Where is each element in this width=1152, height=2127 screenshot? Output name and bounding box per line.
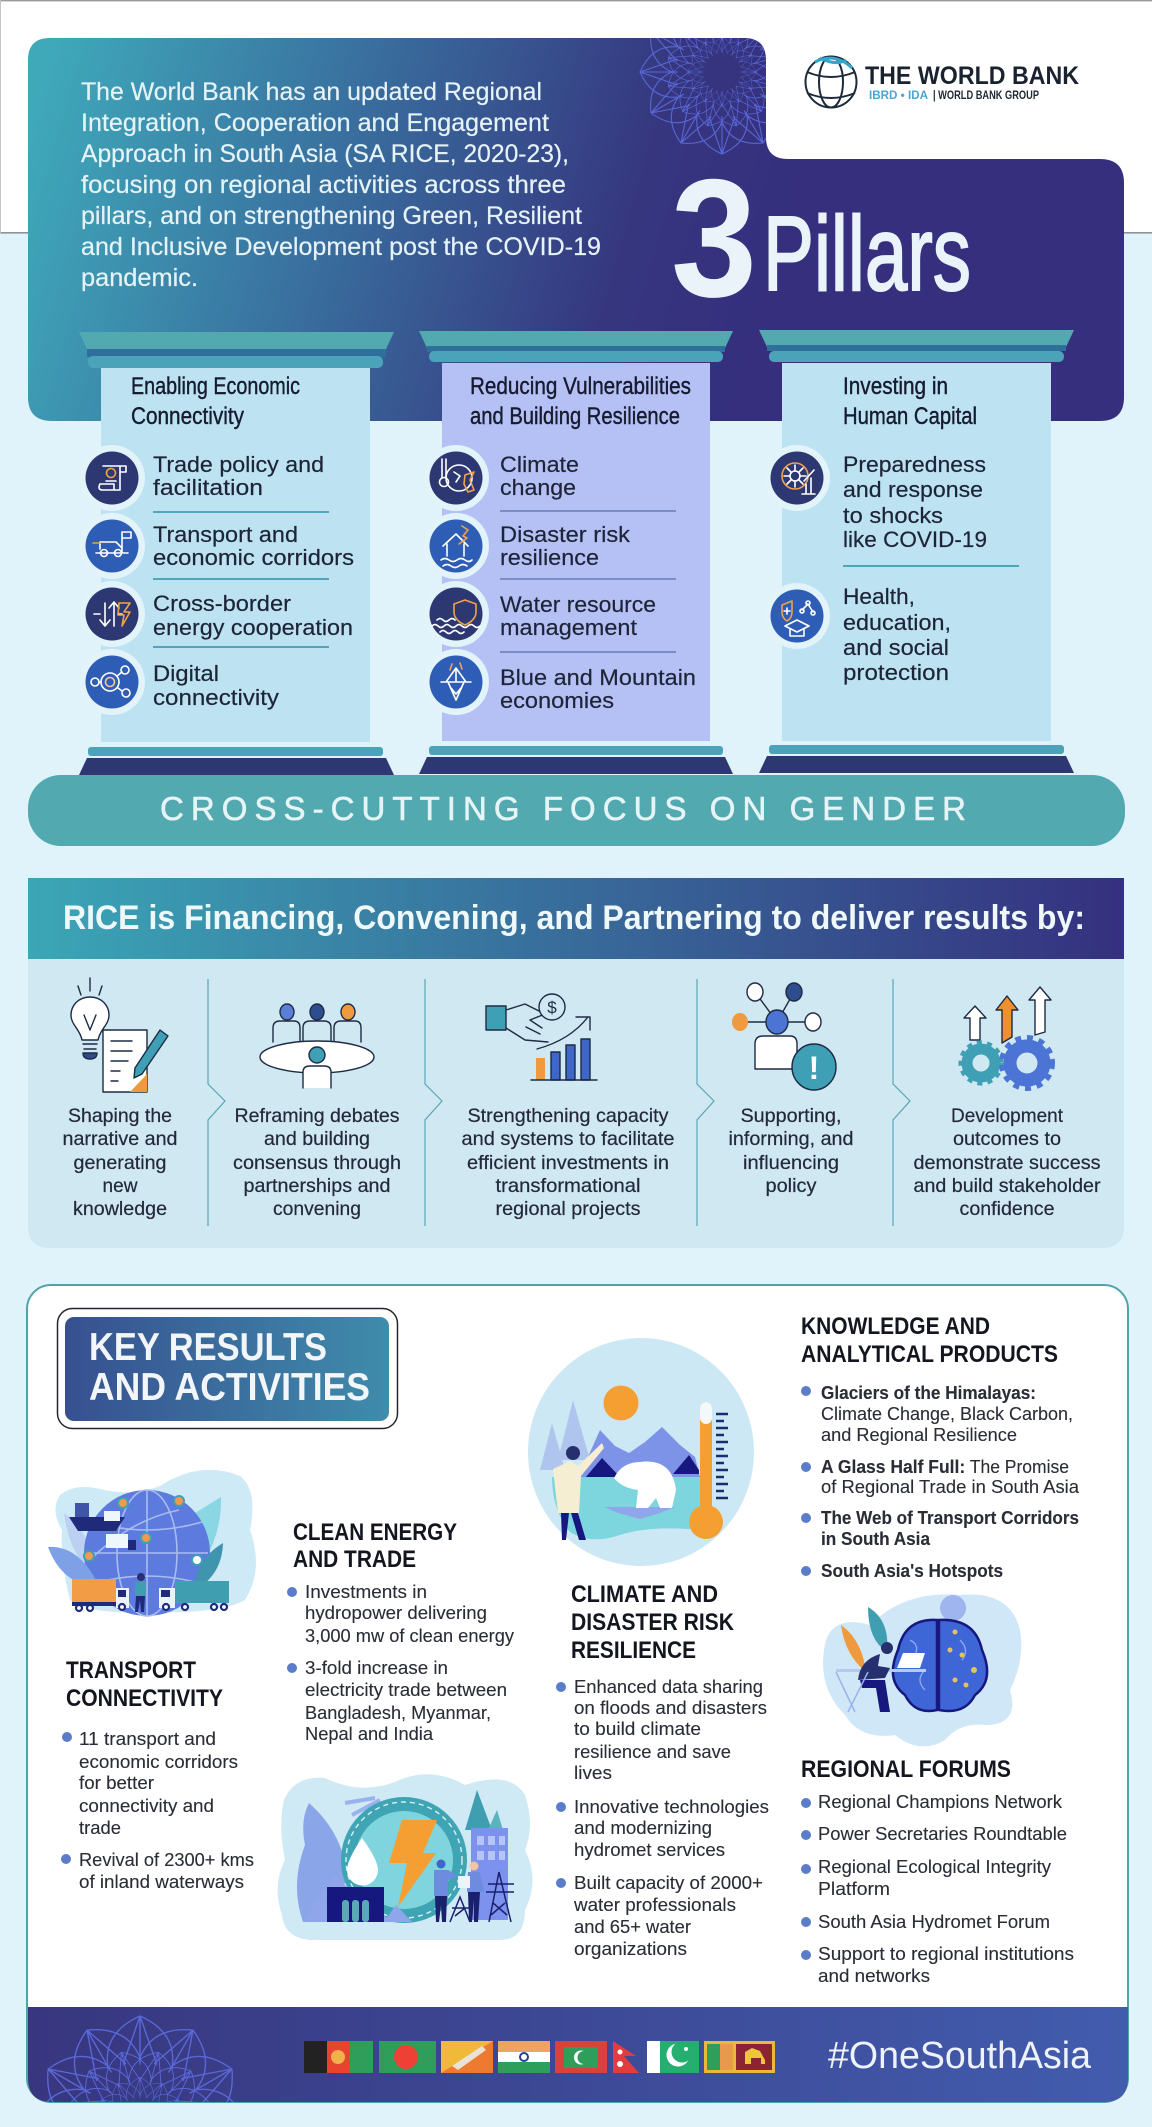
section: climate and disaster risk resilience — [556, 1581, 769, 1959]
intro text: pillars, and on strengthening Green, Resilient — [81, 202, 582, 230]
section: climate and disaster risk resilience: on floods and disasters — [574, 1697, 767, 1718]
section: knowledge and analytical products — [801, 1313, 1080, 1581]
section: climate and disaster risk resilience: Innovative technologies — [574, 1796, 769, 1817]
pillar 3: Investing in Human Capital: Health, — [843, 584, 915, 609]
heading: key results and activities: AND ACTIVITIES — [89, 1366, 370, 1409]
title: 3 Pillars — [671, 144, 971, 332]
intro text: focusing on regional activities across three — [81, 171, 566, 199]
section: climate and disaster risk resilience: to build climate — [574, 1718, 701, 1739]
heading band — [28, 878, 1124, 959]
caption 5: outcomes to — [953, 1128, 1061, 1150]
caption 4: informing, and — [728, 1128, 854, 1150]
caption 5: confidence — [960, 1198, 1054, 1220]
section: knowledge and analytical products: and Regional Resilience — [821, 1424, 1017, 1445]
caption 1: knowledge — [73, 1198, 167, 1220]
section: climate and disaster risk resilience: organizations — [574, 1938, 687, 1959]
section: clean energy and trade: hydropower delivering — [305, 1602, 487, 1623]
title: 3 Pillars: 3 — [671, 144, 757, 332]
worker — [137, 1573, 145, 1581]
section: regional forums: Platform — [818, 1878, 890, 1899]
panel: intro header — [28, 0, 1124, 421]
item: mountain — [423, 649, 489, 715]
section: knowledge and analytical products: The Web of Transport Corridors — [821, 1507, 1079, 1528]
section: transport connectivity — [61, 1657, 254, 1892]
illustration: climate and polar bear — [528, 1338, 754, 1566]
section: knowledge and analytical products: Glaciers of the Himalayas: — [821, 1382, 1036, 1403]
caption 4 — [728, 1105, 854, 1197]
caption 5: and build stakeholder — [914, 1175, 1101, 1197]
towers — [450, 1872, 514, 1922]
flag: Maldives — [555, 2041, 607, 2073]
pillar 3: Investing in Human Capital: and response — [843, 477, 983, 502]
caption 2: Reframing debates — [234, 1105, 400, 1127]
item: energy — [79, 581, 145, 647]
item: health — [764, 583, 830, 649]
pillar 2: Reducing Vulnerabilities — [419, 331, 733, 774]
item: transport — [79, 513, 145, 579]
pillar 3: Investing in Human Capital — [759, 330, 1074, 773]
pillar 3: Investing in Human Capital: like COVID-19 — [843, 527, 987, 552]
section: climate and disaster risk resilience: DISASTER RISK — [571, 1609, 735, 1636]
pillar 3: Investing in Human Capital: protection — [843, 660, 949, 685]
heading: Connectivity — [131, 403, 244, 430]
section: climate and disaster risk resilience: hydromet services — [574, 1839, 725, 1860]
section: climate and disaster risk resilience: RESILIENCE — [571, 1637, 696, 1664]
icon: network advisor: ! — [809, 1050, 819, 1086]
pillar 1: Enabling Economic Connectivity: facilitation — [153, 475, 263, 500]
section: transport connectivity: for better — [79, 1772, 154, 1793]
logo: The World Bank: IBRD • IDA — [869, 88, 928, 102]
heading: key results and activities — [58, 1308, 398, 1428]
flag: Bangladesh — [379, 2041, 436, 2073]
illustration: transport globe — [48, 1470, 256, 1616]
section: climate and disaster risk resilience: resilience and save — [574, 1741, 731, 1762]
section: transport connectivity: trade — [79, 1817, 121, 1838]
heading: Enabling Economic — [131, 373, 300, 400]
icon: growth gears — [961, 987, 1052, 1088]
section: climate and disaster risk resilience: and modernizing — [574, 1817, 712, 1838]
section: clean energy and trade: 3-fold increase in — [305, 1657, 448, 1678]
illustration: brain and analyst — [823, 1594, 1021, 1746]
item: climate — [423, 445, 489, 511]
pillar 3: Investing in Human Capital: to shocks — [843, 503, 943, 528]
section: regional forums — [801, 1756, 1074, 1986]
section: regional forums: South Asia Hydromet Forum — [818, 1911, 1050, 1932]
section: transport connectivity: TRANSPORT — [66, 1657, 196, 1684]
logo: The World Bank: THE WORLD BANK — [865, 62, 1079, 90]
section: clean energy and trade: CLEAN ENERGY — [293, 1519, 457, 1546]
panel: RICE delivery — [28, 878, 1124, 1248]
pillar 2: Reducing Vulnerabilities: resilience — [500, 545, 599, 570]
hashtag: #OneSouthAsia — [828, 2035, 1092, 2077]
caption 3: transformational — [496, 1175, 640, 1197]
item: trade policy — [79, 445, 145, 511]
caption 3: Strengthening capacity — [468, 1105, 669, 1127]
flag: Bhutan — [441, 2041, 493, 2073]
trucks — [72, 1579, 116, 1602]
pillar 1: Enabling Economic Connectivity: Transport and — [153, 522, 298, 547]
pillar 1: Enabling Economic Connectivity: economic corridors — [153, 545, 354, 570]
section: knowledge and analytical products: ANALYTICAL PRODUCTS — [801, 1341, 1058, 1368]
heading: Reducing Vulnerabilities — [470, 373, 691, 400]
heading — [131, 373, 300, 430]
section: knowledge and analytical products: Climate Change, Black Carbon, — [821, 1403, 1073, 1424]
mandala ornament — [46, 2015, 234, 2102]
pillar 1: Enabling Economic Connectivity: energy cooperation — [153, 615, 353, 640]
icon: globe — [806, 56, 856, 108]
heading — [470, 373, 691, 430]
pillar 1: Enabling Economic Connectivity — [79, 332, 394, 775]
section: clean energy and trade: AND TRADE — [293, 1546, 416, 1573]
section: transport connectivity: 11 transport and — [79, 1728, 216, 1749]
caption 1: new — [102, 1175, 138, 1197]
intro text: Integration, Cooperation and Engagement — [81, 109, 549, 137]
pillar 2: Reducing Vulnerabilities: management — [500, 615, 638, 640]
section: climate and disaster risk resilience: lives — [574, 1762, 612, 1783]
mandala ornament — [640, 38, 766, 154]
caption 1: narrative and — [62, 1128, 178, 1150]
caption 5: demonstrate success — [914, 1152, 1101, 1174]
pillar 1: Enabling Economic Connectivity: Cross-border — [153, 591, 292, 616]
caption 1: generating — [74, 1152, 166, 1174]
icon: round table — [260, 1004, 374, 1088]
section: regional forums: Power Secretaries Roundtable — [818, 1823, 1067, 1844]
caption 3: and systems to facilitate — [462, 1128, 674, 1150]
section: transport connectivity: connectivity and — [79, 1795, 214, 1816]
section: climate and disaster risk resilience: Enhanced data sharing — [574, 1676, 763, 1697]
intro text: Approach in South Asia (SA RICE, 2020-23), — [81, 140, 569, 168]
section: knowledge and analytical products: in South Asia — [821, 1528, 931, 1549]
heading: Human Capital — [843, 403, 977, 430]
flag: Sri Lanka — [704, 2041, 775, 2073]
section: climate and disaster risk resilience: CLIMATE AND — [571, 1581, 718, 1608]
section: knowledge and analytical products: South Asia's Hotspots — [821, 1560, 1003, 1581]
pillar 1: Enabling Economic Connectivity: Trade policy and — [153, 452, 324, 477]
illustration: clean energy — [278, 1774, 532, 1940]
logo: The World Bank: | WORLD BANK GROUP — [933, 88, 1039, 102]
banner: cross-cutting focus on gender: CROSS-CUTTING FOCUS ON GENDER — [160, 790, 966, 827]
section: clean energy and trade — [287, 1519, 515, 1744]
intro text — [81, 78, 601, 292]
heading: and Building Resilience — [470, 403, 680, 430]
section: climate and disaster risk resilience: water professionals — [573, 1894, 736, 1915]
section: transport connectivity: Revival of 2300+ kms — [79, 1849, 254, 1870]
heading: Investing in — [843, 373, 948, 400]
section: regional forums: Regional Ecological Integrity — [818, 1856, 1052, 1877]
section: regional forums: Support to regional institutions — [818, 1943, 1074, 1964]
section: clean energy and trade: electricity trade between — [305, 1679, 507, 1700]
flag: Afghanistan — [304, 2041, 373, 2073]
pillar 1: Enabling Economic Connectivity: Digital — [153, 661, 219, 686]
section: climate and disaster risk resilience: and 65+ water — [574, 1916, 691, 1937]
icon: investment — [486, 994, 597, 1080]
intro text: The World Bank has an updated Regional — [81, 78, 542, 106]
section: clean energy and trade: 3,000 mw of clean energy — [305, 1625, 515, 1646]
pillar 3: Investing in Human Capital: education, — [843, 610, 951, 635]
logo: The World Bank — [806, 56, 1079, 108]
caption 2: consensus through — [233, 1152, 401, 1174]
caption 3 — [462, 1105, 674, 1220]
pillar 1: Enabling Economic Connectivity: connectivity — [153, 685, 280, 710]
section: knowledge and analytical products: of Regional Trade in South Asia — [821, 1476, 1080, 1497]
section: transport connectivity: economic corridors — [79, 1751, 238, 1772]
caption 3: regional projects — [496, 1198, 641, 1220]
pillar 2: Reducing Vulnerabilities: Disaster risk — [500, 522, 631, 547]
panel: key results — [27, 1285, 1128, 2127]
section: knowledge and analytical products: A Glass Half Full: The Promise — [821, 1456, 1069, 1477]
caption 4: policy — [766, 1175, 817, 1197]
caption 3: efficient investments in — [467, 1152, 669, 1174]
caption 4: Supporting, — [740, 1105, 842, 1127]
caption 2 — [233, 1105, 401, 1220]
item: disaster — [423, 513, 489, 579]
section: transport connectivity: of inland waterways — [79, 1871, 244, 1892]
caption 4: influencing — [743, 1152, 839, 1174]
caption 2: and building — [264, 1128, 370, 1150]
banner: cross-cutting focus on gender — [28, 775, 1125, 846]
section: regional forums: and networks — [818, 1965, 930, 1986]
pillar 3: Investing in Human Capital: Preparedness — [843, 452, 986, 477]
caption 2: partnerships and — [244, 1175, 390, 1197]
footer band — [28, 2007, 1128, 2102]
heading band: RICE is Financing, Convening, and Partnering to deliver results by: — [63, 899, 1085, 937]
section: clean energy and trade: Nepal and India — [305, 1723, 434, 1744]
caption 2: convening — [273, 1198, 361, 1220]
engineers — [436, 1860, 446, 1868]
flag: Nepal — [613, 2041, 639, 2073]
title: 3 Pillars: Pillars — [763, 195, 971, 313]
pillar 2: Reducing Vulnerabilities: economies — [500, 688, 614, 713]
section: climate and disaster risk resilience: Built capacity of 2000+ — [574, 1872, 763, 1893]
ship — [69, 1517, 125, 1531]
icon: investment: $ — [547, 998, 557, 1017]
heading: key results and activities: KEY RESULTS — [89, 1326, 327, 1369]
intro text: pandemic. — [81, 264, 198, 292]
pillar 2: Reducing Vulnerabilities: Climate — [500, 452, 579, 477]
section: regional forums: REGIONAL FORUMS — [801, 1756, 1011, 1783]
item: water — [423, 581, 489, 647]
section: clean energy and trade: Bangladesh, Myanmar, — [305, 1702, 491, 1723]
scientist — [566, 1446, 580, 1460]
section: transport connectivity: CONNECTIVITY — [66, 1685, 223, 1712]
pillar 2: Reducing Vulnerabilities: change — [500, 475, 576, 500]
section: regional forums: Regional Champions Network — [818, 1791, 1063, 1812]
heading — [843, 373, 977, 430]
section: clean energy and trade: Investments in — [305, 1581, 427, 1602]
icon: bulb and document — [71, 978, 168, 1092]
item: preparedness — [764, 445, 830, 511]
pillar 3: Investing in Human Capital: and social — [843, 635, 949, 660]
icon: network advisor — [732, 983, 836, 1090]
pillar 2: Reducing Vulnerabilities: Water resource — [500, 592, 656, 617]
flag: India — [498, 2041, 550, 2073]
step dividers — [208, 979, 910, 1226]
item: digital — [79, 649, 145, 715]
flag: Pakistan — [647, 2041, 699, 2073]
section: knowledge and analytical products: KNOWLEDGE AND — [801, 1313, 990, 1340]
caption 1 — [62, 1105, 178, 1220]
caption 5 — [914, 1105, 1101, 1220]
caption 1: Shaping the — [68, 1105, 172, 1127]
caption 5: Development — [951, 1105, 1064, 1127]
pillar 2: Reducing Vulnerabilities: Blue and Mountain — [500, 665, 696, 690]
intro text: and Inclusive Development post the COVID-19 — [81, 233, 601, 261]
